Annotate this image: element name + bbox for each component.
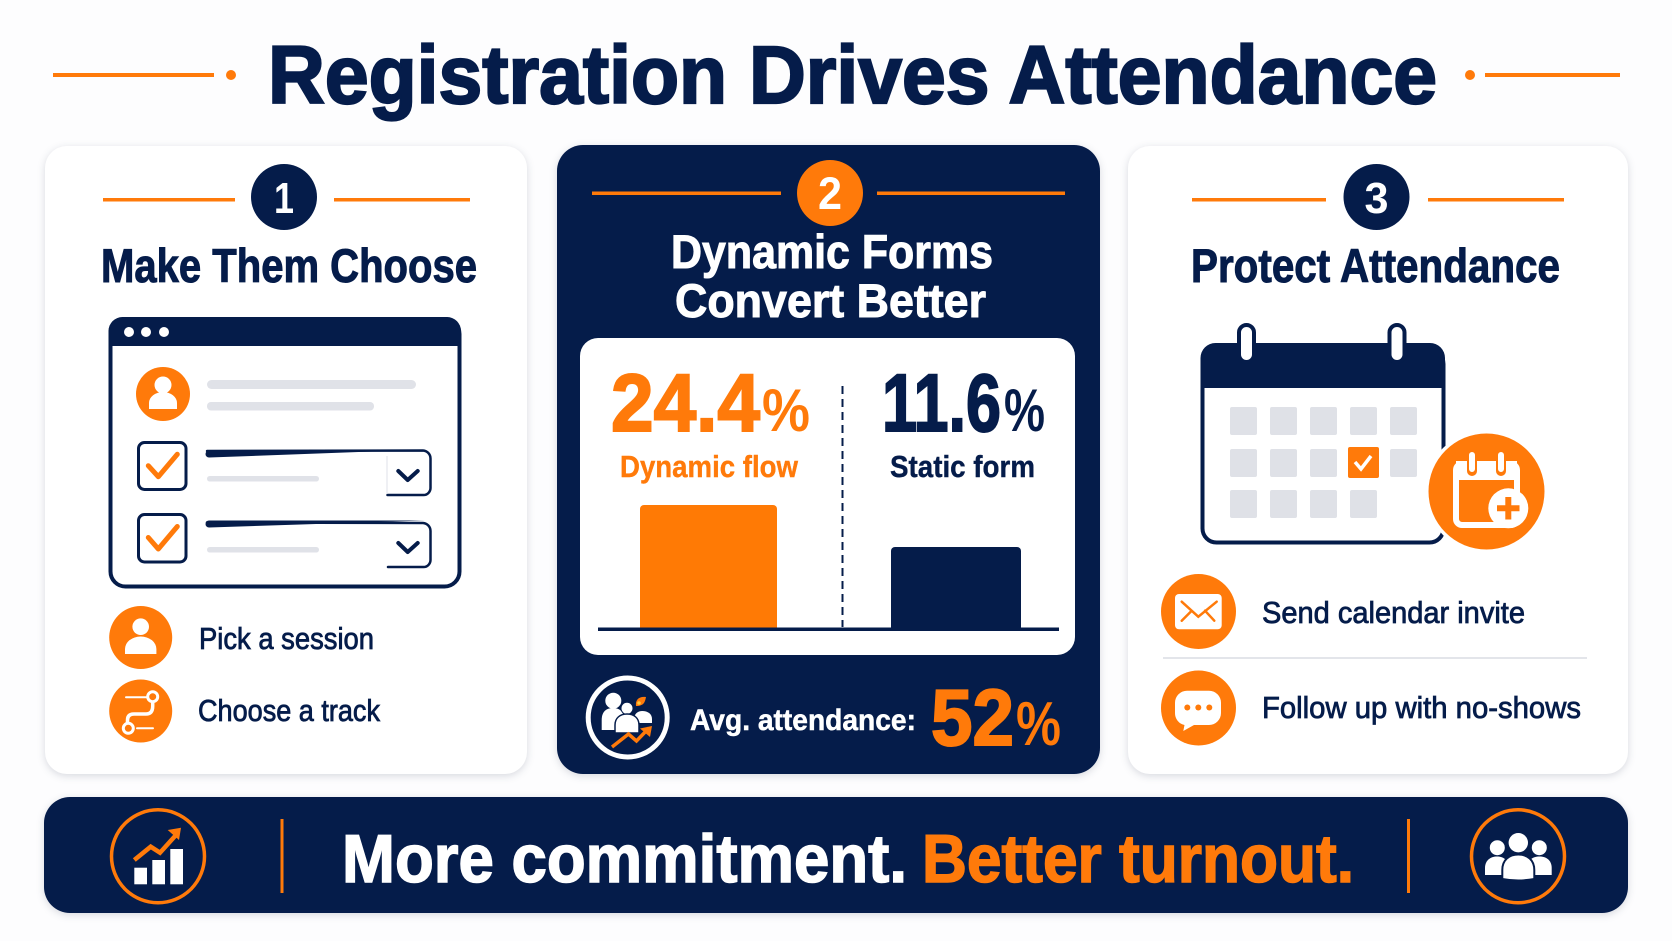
icon: person [109,606,172,669]
heading: dynamic forms convert better: Convert Better [675,274,986,327]
average attendance value [931,673,1061,762]
icon: track [109,680,172,742]
label: send calendar invite: Send calendar invite [1262,595,1525,630]
panel: make them choose [45,146,527,774]
title: Registration Drives Attendance [268,30,1437,121]
icon: attendance growth [588,678,667,757]
panel: comparison chart [580,338,1075,655]
icon: add to calendar [1425,430,1548,553]
heading: dynamic forms convert better [671,225,993,327]
icon: envelope [1161,574,1236,649]
step number 1: 1 [274,174,294,223]
heading: protect attendance: Protect Attendance [1191,239,1560,292]
step number 2: 2 [818,168,842,219]
icon: people group [1472,810,1564,903]
dynamic flow value: 24.4 [611,358,760,449]
icon: growth chart [112,810,204,903]
step number 2 [592,160,1065,226]
panel: dynamic forms convert better [557,145,1100,774]
label: follow up with no-shows: Follow up with no-shows [1262,690,1581,725]
banner text: More commitment. [342,821,907,897]
average attendance value: 52 [931,673,1014,762]
step number 3: 3 [1364,174,1388,223]
heading: make them choose: Make Them Choose [101,239,477,292]
bar: dynamic flow [640,505,777,628]
banner text [342,821,1354,897]
icon: form window [108,317,461,586]
label: choose a track: Choose a track [198,693,380,728]
bar: static form [891,547,1021,628]
label: average attendance: Avg. attendance: [690,704,916,737]
static form value: % [1004,377,1045,444]
step number 1 [103,164,470,230]
label: dynamic flow: Dynamic flow [620,449,799,484]
label: static form: Static form [890,449,1035,484]
static form value: 11.6 [882,358,1001,449]
banner: takeaway [44,797,1628,913]
icon: calendar [1200,325,1445,542]
banner text: Better turnout. [922,821,1354,897]
panel: protect attendance [1128,146,1628,774]
average attendance value: % [1016,690,1061,759]
heading: dynamic forms convert better: Dynamic Forms [671,225,993,278]
dynamic flow value: % [762,377,810,444]
label: pick a session: Pick a session [199,621,374,656]
icon: chat bubble [1161,670,1236,746]
step number 3 [1192,164,1564,230]
